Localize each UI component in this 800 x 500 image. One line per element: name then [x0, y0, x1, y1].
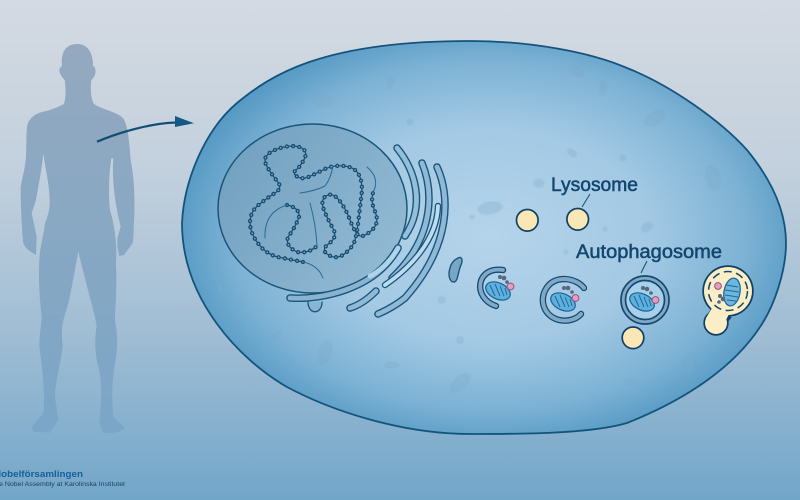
lysosome approaching autophagosome: [622, 327, 644, 349]
lysosome left: [516, 210, 538, 231]
lysosome right: [567, 208, 588, 230]
arrow from body to cell: [97, 116, 194, 142]
label: Lysosome: Lysosome: [551, 175, 638, 196]
small ER vesicle: [449, 257, 462, 282]
nucleus: [218, 124, 407, 293]
stage 1: forming phagophore: [480, 270, 514, 306]
label: Autophagosome: [576, 242, 722, 273]
stage 3: closed autophagosome: [621, 276, 669, 324]
stage 4: autolysosome: [704, 267, 752, 334]
cell membrane and cytoplasm: [182, 41, 786, 434]
credit: Nobelförsamlingen: [0, 469, 125, 488]
faint background organelles: [217, 66, 723, 396]
endoplasmic reticulum: [290, 148, 445, 314]
label: Autophagosome: Autophagosome: [576, 242, 722, 263]
human body silhouette: [21, 44, 134, 433]
chromatin strands: [250, 146, 377, 278]
stage 2: expanding phagophore: [543, 279, 584, 321]
label: Lysosome: [551, 175, 638, 207]
